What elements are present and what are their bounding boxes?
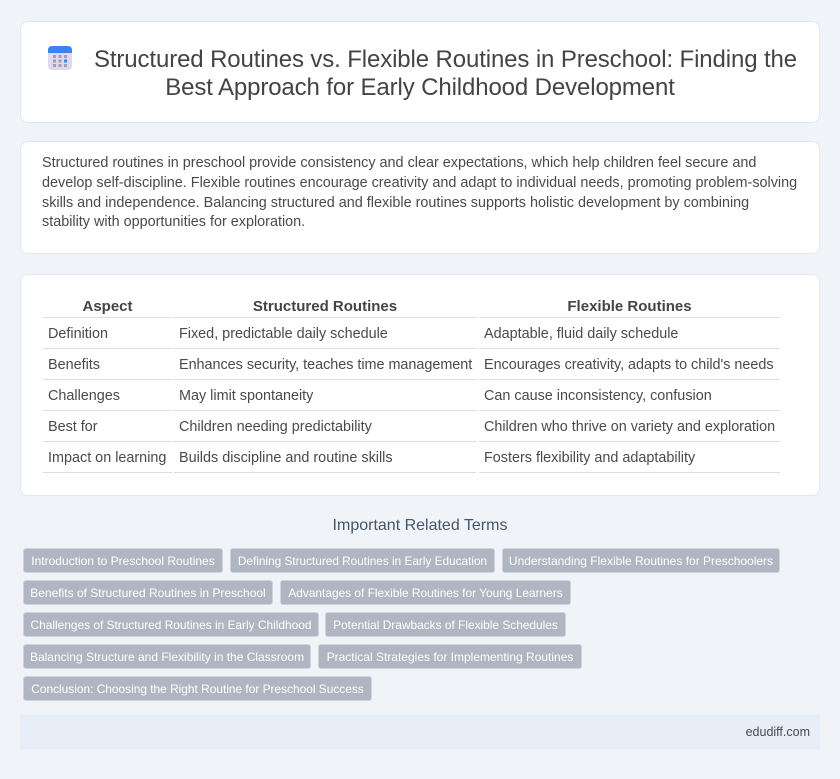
tag [23,548,223,573]
row: challenges: Challenges [48,388,120,404]
tag: Introduction to Preschool Routines [31,554,215,568]
title: Structured Routines vs. Flexible Routines in Preschool: Finding the [94,46,797,73]
tag: Advantages of Flexible Routines for Young Learners [288,586,563,600]
table header: Aspect [82,298,133,315]
related terms heading: Important Related Terms [333,517,507,534]
challenges flexible: Can cause inconsistency, confusion [484,388,712,404]
tag [318,644,582,669]
tag: Challenges of Structured Routines in Early Childhood [31,618,311,632]
best for structured: Children needing predictability [179,419,372,435]
tag [23,612,319,637]
intro panel [20,141,820,254]
footer text: edudiff.com [746,725,810,739]
row: best for: Best for [48,419,98,435]
intro text: Structured routines in preschool provide consistency and clear expectations, which help children feel secure and [42,155,756,171]
title: Best Approach for Early Childhood Development [165,74,675,101]
title card [20,21,820,123]
tag [23,644,311,669]
tag: Potential Drawbacks of Flexible Schedules [333,618,558,632]
tag [502,548,780,573]
benefits flexible: Encourages creativity, adapts to child's needs [484,357,774,373]
tag [230,548,495,573]
intro text: skills and independence. Balancing structured and flexible routines supports holistic development by combining [42,195,749,211]
comparison table panel [20,274,820,496]
header: structured: Structured Routines [253,298,397,315]
tag [325,612,566,637]
footer bar [20,715,820,749]
challenges structured: May limit spontaneity [179,388,313,404]
row: impact: Impact on learning [48,450,166,466]
tag: Practical Strategies for Implementing Routines [327,650,573,664]
tag: Understanding Flexible Routines for Preschoolers [509,554,773,568]
tag: Balancing Structure and Flexibility in the Classroom [30,650,304,664]
definition structured: Fixed, predictable daily schedule [179,326,388,342]
icon: calendar [48,46,72,70]
tag: Benefits of Structured Routines in Preschool [30,586,266,600]
intro text: stability with opportunities for exploration. [42,214,305,230]
tag: Conclusion: Choosing the Right Routine for Preschool Success [31,682,364,696]
title [94,46,797,101]
best for flexible: Children who thrive on variety and exploration [484,419,775,435]
row: definition: Definition [48,326,108,342]
row: benefits: Benefits [48,357,100,373]
tag [23,676,372,701]
definition flexible: Adaptable, fluid daily schedule [484,326,678,342]
intro text: develop self-discipline. Flexible routines encourage creativity and adapt to individual needs, promoting problem-solving [42,175,797,191]
benefits structured: Enhances security, teaches time management [179,357,472,373]
impact structured: Builds discipline and routine skills [179,450,393,466]
header: flexible: Flexible Routines [567,298,692,315]
tag [23,580,273,605]
intro text [42,155,797,230]
tag: Defining Structured Routines in Early Education [238,554,487,568]
impact flexible: Fosters flexibility and adaptability [484,450,695,466]
tag [280,580,571,605]
